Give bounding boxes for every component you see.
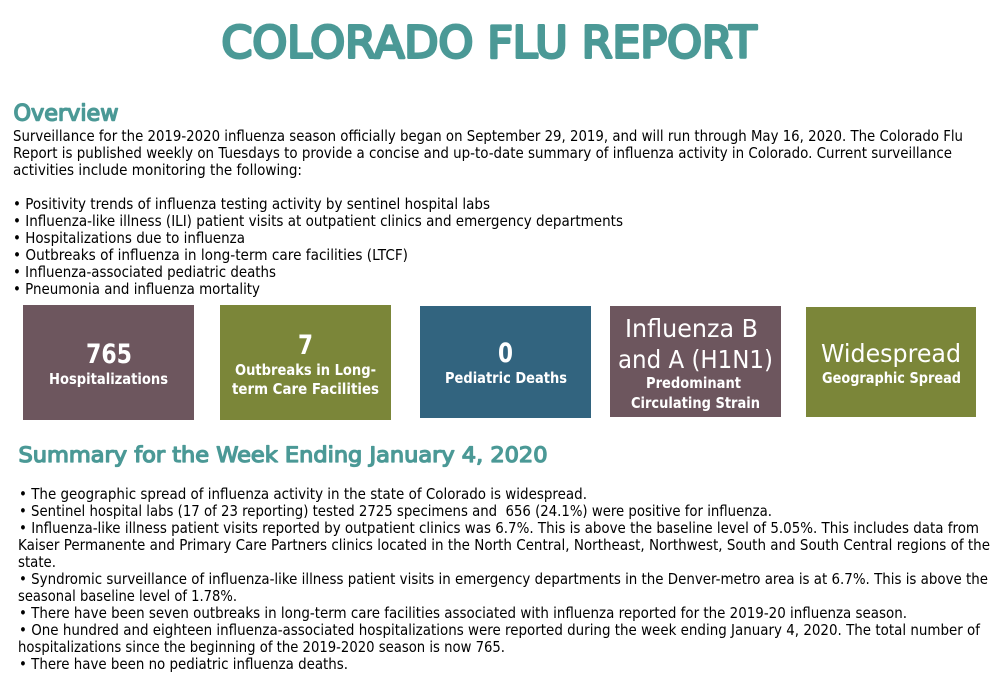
panel: overview [13, 102, 963, 298]
panel: pediatric deaths: Pediatric Deaths [445, 370, 567, 387]
text block: summary bullets: • There have been no pediatric influenza deaths. [19, 656, 348, 673]
text block: summary bullets: state. [18, 554, 56, 571]
panel: weekly summary [18, 443, 990, 673]
text block: overview intro [13, 128, 963, 179]
panel: predominant strain [610, 306, 781, 417]
panel: hospitalizations: Hospitalizations [49, 371, 168, 388]
panel: outbreaks: term Care Facilities [232, 381, 379, 398]
heading: summary: Summary for the Week Ending January 4, 2020 [18, 443, 548, 468]
panel: outbreaks: Outbreaks in Long- [235, 362, 376, 379]
panel: outbreaks: 7 [298, 330, 313, 361]
panel: pediatric deaths [420, 306, 591, 418]
panel: hospitalizations: 765 [86, 339, 132, 370]
text block: overview intro: activities include monitoring the following: [13, 162, 302, 179]
panel: outbreaks [220, 305, 391, 420]
panel: geographic spread: Widespread [821, 339, 961, 368]
text block: summary bullets: • The geographic spread of influenza activity in the state of Colorado is widespread. [19, 486, 587, 503]
text block: summary bullets: seasonal baseline level of 1.78%. [18, 588, 237, 605]
panel: predominant strain: Predominant [646, 375, 741, 392]
text block: summary bullets: • Sentinel hospital labs (17 of 23 reporting) tested 2725 specimens and 656 (24.1%) were positive for influenza. [19, 503, 772, 520]
text block: summary bullets: hospitalizations since the beginning of the 2019-2020 season is now 765. [18, 639, 505, 656]
panel: pediatric deaths: 0 [498, 338, 513, 369]
panel: predominant strain: and A (H1N1) [618, 345, 773, 374]
panel: hospitalizations [23, 305, 194, 420]
panel: predominant strain: Influenza B [625, 314, 758, 343]
text block: surveillance activities list: • Hospitalizations due to influenza [13, 230, 245, 247]
panel: geographic spread: Geographic Spread [822, 370, 961, 387]
text block: surveillance activities list: • Pneumonia and influenza mortality [13, 281, 260, 298]
text block: surveillance activities list: • Outbreaks of influenza in long-term care facilities (LTCF) [13, 247, 408, 264]
panel: predominant strain: Circulating Strain [631, 395, 760, 412]
heading: overview: Overview [14, 102, 119, 126]
text block: surveillance activities list: • Positivity trends of influenza testing activity by sentinel hospital labs [13, 196, 490, 213]
text block: summary bullets: • There have been seven outbreaks in long-term care facilities associated with influenza reported for the 2019-20 influenza season. [19, 605, 907, 622]
text block: surveillance activities list: • Influenza-associated pediatric deaths [13, 264, 276, 281]
text block: surveillance activities list [13, 196, 623, 298]
title: COLORADO FLU REPORT [222, 18, 757, 68]
text block: surveillance activities list: • Influenza-like illness (ILI) patient visits at outpatient clinics and emergency departments [13, 213, 623, 230]
panel: geographic spread [806, 307, 976, 417]
text block: summary bullets [18, 486, 990, 673]
